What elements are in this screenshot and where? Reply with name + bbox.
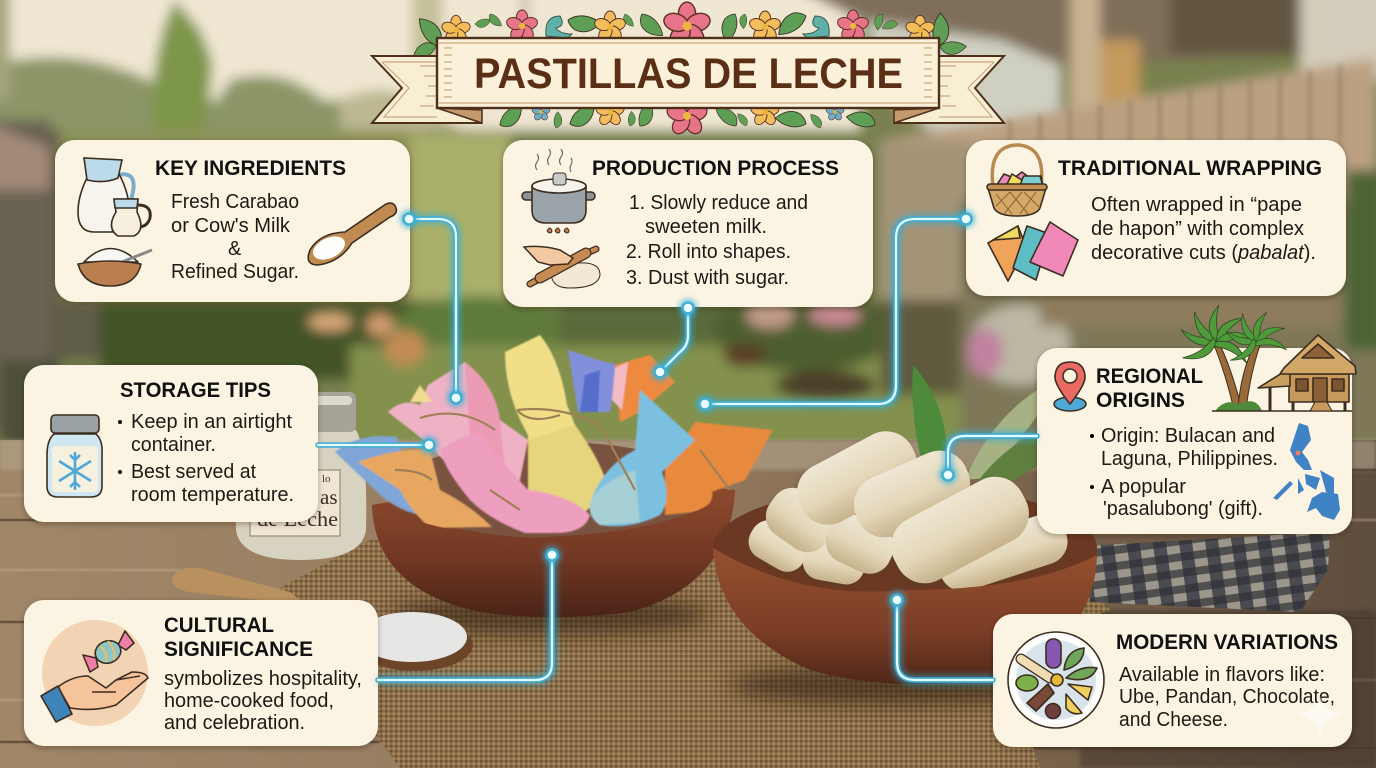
connector: storage tips	[318, 436, 438, 454]
background: blurred tropical garden and house	[0, 0, 1376, 460]
bullet list	[118, 411, 294, 506]
panel: modern variations	[993, 614, 1352, 747]
icon: sugar bowl	[78, 248, 152, 286]
bullet list: room temperature.	[131, 484, 294, 506]
body text: home-cooked food,	[164, 690, 334, 712]
body text: Refined Sugar.	[171, 261, 299, 283]
heading	[164, 614, 313, 661]
heading: PRODUCTION PROCESS	[592, 157, 839, 180]
numbered steps: 1. Slowly reduce and	[629, 192, 808, 214]
jar of pastillas: de Leche	[257, 507, 338, 531]
icon: location pin	[1054, 362, 1086, 411]
floral garland	[410, 2, 967, 137]
body text	[1119, 664, 1335, 731]
body text: Available in flavors like:	[1119, 664, 1325, 686]
icon: basket of wrapped candies	[987, 145, 1047, 216]
bullet list: Origin: Bulacan and	[1101, 425, 1275, 447]
body text: symbolizes hospitality,	[164, 668, 362, 690]
body text	[171, 191, 299, 283]
body text: Often wrapped in “pape	[1091, 194, 1302, 216]
bullet list: Laguna, Philippines.	[1101, 448, 1278, 470]
right bowl with pastillas	[713, 421, 1097, 684]
icon: wooden spoon with sugar	[308, 203, 396, 265]
ribbon inner lines	[382, 62, 994, 117]
panel: regional origins	[1037, 305, 1356, 534]
heading: STORAGE TIPS	[120, 379, 271, 402]
burlap mat	[272, 540, 1110, 768]
panel: storage tips	[24, 365, 318, 522]
bullet list: 'pasalubong' (gift).	[1103, 498, 1263, 520]
wooden spoon on table	[172, 568, 300, 600]
heading: CULTURAL	[164, 614, 274, 637]
icon: palm trees	[1178, 305, 1288, 411]
body text	[164, 668, 362, 734]
body text: de hapon” with complex	[1091, 218, 1304, 240]
title text: PASTILLAS DE LECHE	[474, 50, 903, 98]
watermark sparkle	[1296, 696, 1344, 735]
bullet list: Best served at	[131, 461, 256, 483]
body text: Ube, Pandan, Chocolate,	[1119, 686, 1335, 708]
icon: jar with snowflake	[47, 415, 102, 497]
foliage at top left	[0, 0, 530, 150]
body text: or Cow's Milk	[171, 215, 291, 237]
bullet list: container.	[131, 434, 216, 456]
body text: and celebration.	[164, 712, 305, 734]
bullet list: A popular	[1101, 476, 1186, 498]
panel: traditional wrapping	[966, 140, 1346, 296]
icon: milk pitchers	[78, 158, 150, 236]
connector: modern variations	[888, 591, 993, 680]
wrapped candies	[335, 335, 773, 533]
bullet list	[1090, 425, 1278, 520]
icon: hand offering candy	[41, 620, 148, 726]
house railing bars	[1010, 65, 1340, 200]
connector: production process	[651, 299, 697, 381]
numbered steps: 2. Roll into shapes.	[626, 241, 791, 263]
icon: plate of flavours	[1008, 632, 1104, 728]
ribbon right fold	[894, 108, 939, 123]
heading: KEY INGREDIENTS	[155, 157, 346, 180]
wooden table	[0, 440, 1376, 768]
jar of pastillas	[236, 392, 366, 560]
sugar dish	[357, 612, 473, 671]
ribbon right tail	[894, 56, 1004, 123]
panel: key ingredients	[55, 140, 410, 302]
heading: MODERN VARIATIONS	[1116, 631, 1338, 654]
numbered steps: 3. Dust with sugar.	[626, 267, 789, 289]
heading: SIGNIFICANCE	[164, 638, 313, 661]
heading	[1096, 365, 1203, 412]
ribbon left fold	[437, 108, 482, 123]
panel: production process	[503, 140, 873, 307]
icon: steaming pot	[522, 149, 595, 233]
connector: regional origins	[939, 436, 1037, 484]
body text: and Cheese.	[1119, 709, 1228, 731]
icon: coloured papers	[988, 222, 1078, 281]
bowl shadows	[390, 595, 1070, 705]
body text: Fresh Carabao	[171, 191, 299, 213]
left bowl with wrapped pastillas	[335, 335, 773, 617]
panel: cultural significance	[24, 600, 378, 746]
jar of pastillas: lo	[322, 473, 331, 485]
banner plate	[437, 38, 939, 108]
body text: &	[228, 238, 242, 260]
ribbon left tail	[372, 56, 482, 123]
connector: traditional wrapping	[696, 210, 975, 413]
banner rule lines	[439, 43, 937, 103]
icon: hand with rolling pin	[524, 246, 600, 288]
heading: ORIGINS	[1096, 389, 1185, 412]
jar of pastillas: as	[320, 485, 338, 509]
icon: nipa hut	[1212, 335, 1356, 411]
bullet list: Keep in an airtight	[131, 411, 292, 433]
twine ties	[395, 409, 730, 510]
heading: TRADITIONAL WRAPPING	[1058, 157, 1322, 180]
connector: cultural significance	[378, 546, 561, 680]
connector: key ingredients	[400, 210, 465, 407]
icon: Philippines map	[1273, 423, 1340, 520]
numbered steps: sweeten milk.	[645, 216, 767, 238]
body text	[1091, 194, 1316, 264]
title banner	[372, 2, 1004, 137]
checkered cloth	[1085, 532, 1330, 612]
heading: REGIONAL	[1096, 365, 1203, 388]
numbered steps	[626, 192, 808, 289]
pandan leaves	[912, 365, 1040, 488]
body text: decorative cuts (pabalat).	[1091, 242, 1316, 264]
